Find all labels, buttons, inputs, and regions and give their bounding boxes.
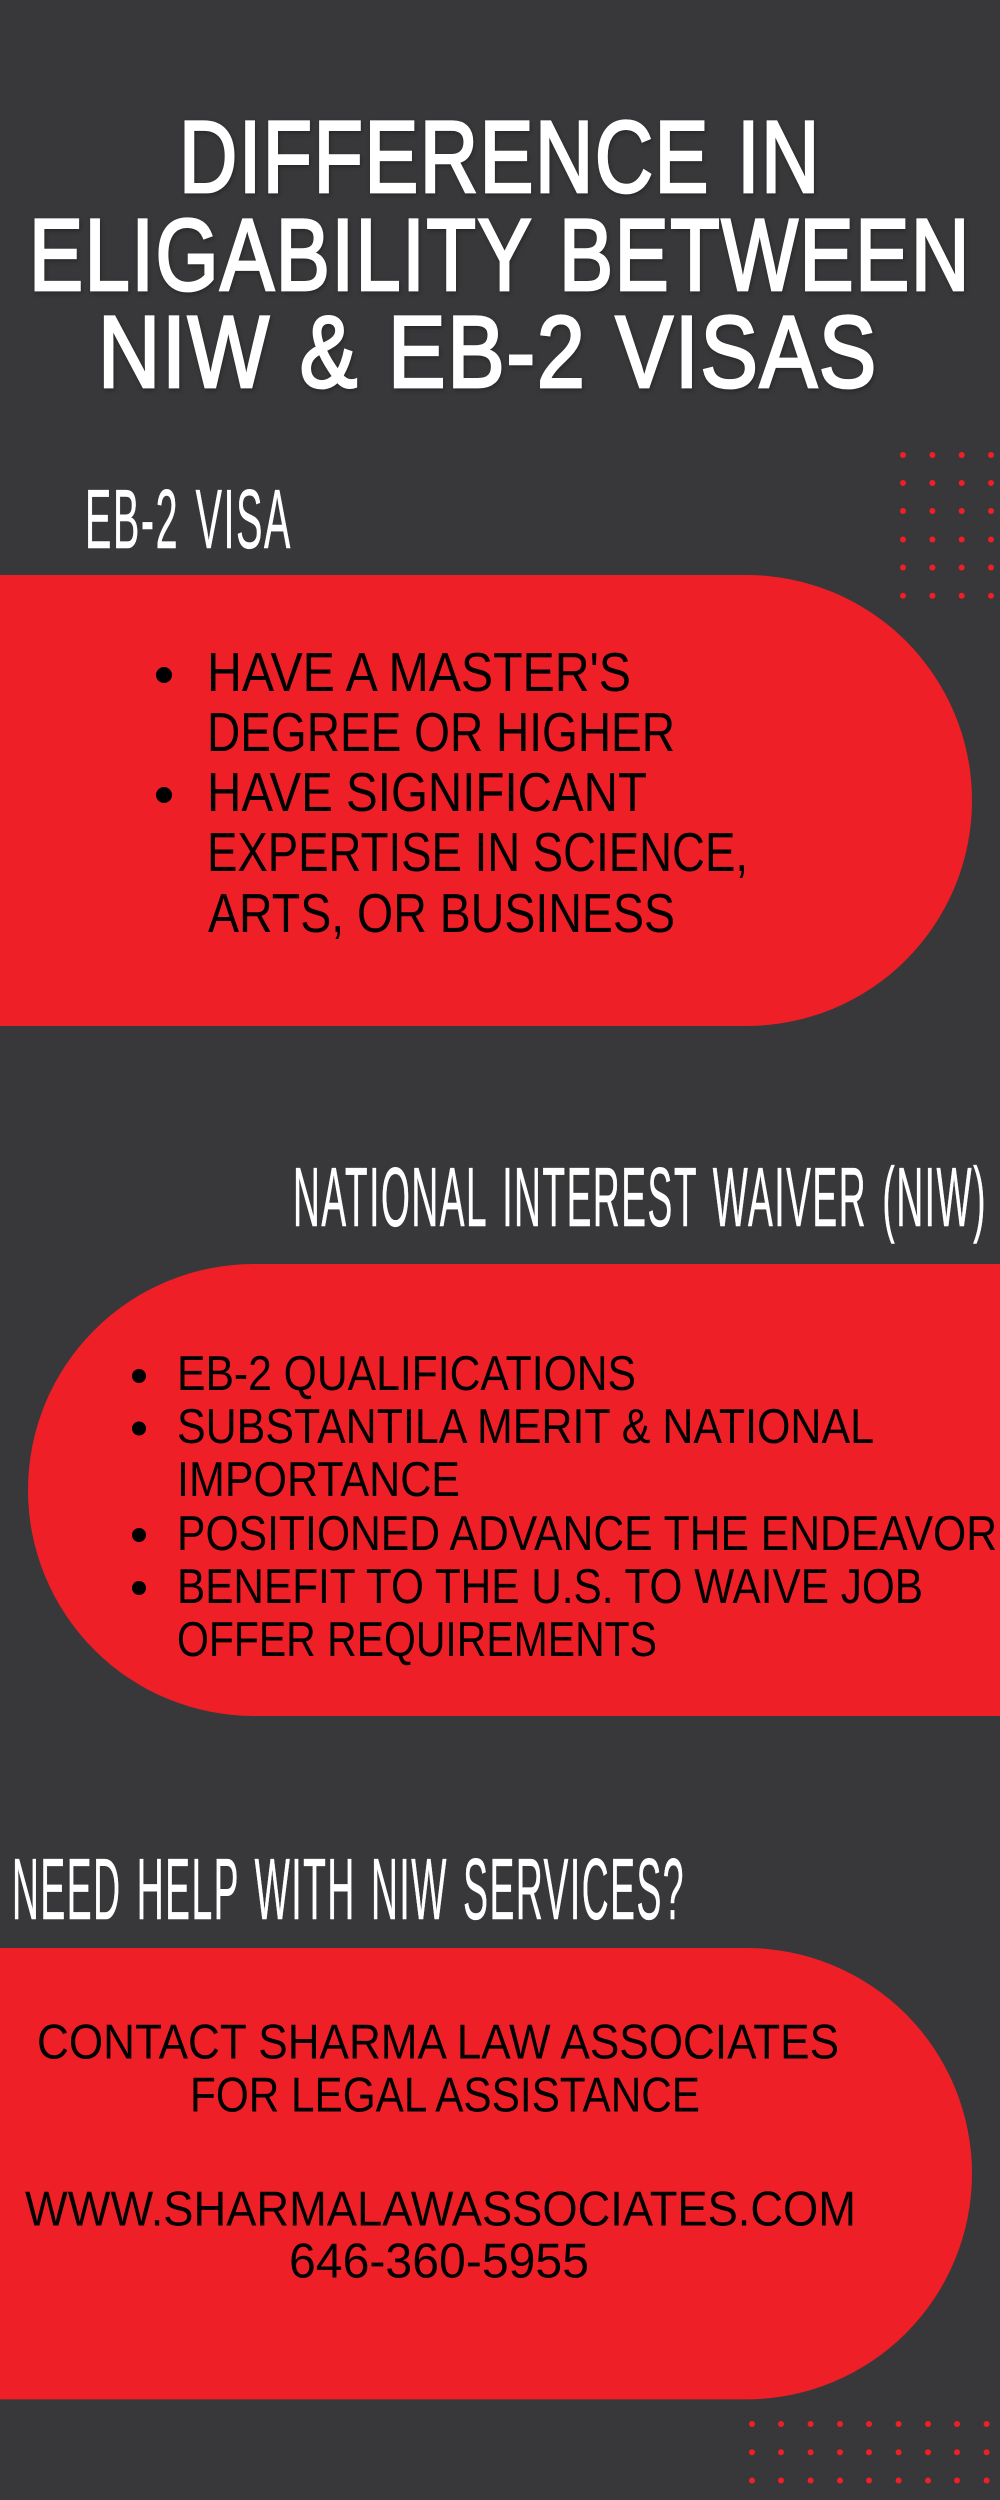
bullet list: EXPERTISE IN SCIENCE,	[207, 821, 748, 883]
panel shape	[0, 1948, 972, 2399]
bullet list	[156, 641, 748, 944]
title: DIFFERENCE IN	[179, 100, 821, 214]
bullet list: OFFER REQUIREMENTS	[177, 1613, 657, 1667]
bullet list: IMPORTANCE	[177, 1453, 460, 1507]
bullet list: EB-2 QUALIFICATIONS	[177, 1347, 636, 1401]
bullet list: SUBSTANTILA MERIT & NATIONAL	[177, 1400, 874, 1454]
bullet list: ARTS, OR BUSINESS	[208, 882, 675, 944]
decorative dots: bottom right	[749, 2421, 990, 2484]
contact text: FOR LEGAL ASSISTANCE	[190, 2068, 700, 2122]
panel: EB-2 visa requirements	[0, 575, 972, 1026]
contact text: WWW.SHARMALAWASSOCIATES.COM	[25, 2182, 856, 2236]
contact text: 646-360-5955	[289, 2234, 589, 2288]
decorative dots: top right	[900, 452, 994, 599]
contact text	[25, 2016, 856, 2288]
bullet list: HAVE A MASTER'S	[207, 641, 631, 703]
title	[29, 100, 971, 409]
text: EB-2 VISA	[85, 472, 292, 566]
bullet list	[132, 1347, 997, 1667]
panel shape	[0, 575, 972, 1026]
panel: NIW requirements	[28, 1264, 1000, 1716]
panel shape	[28, 1264, 1000, 1716]
bullet list: DEGREE OR HIGHER	[207, 701, 675, 763]
contact text: CONTACT SHARMA LAW ASSOCIATES	[37, 2016, 839, 2070]
title: NIW & EB-2 VISAS	[98, 295, 878, 409]
panel: contact	[0, 1948, 972, 2399]
bullet list: HAVE SIGNIFICANT	[207, 761, 647, 823]
